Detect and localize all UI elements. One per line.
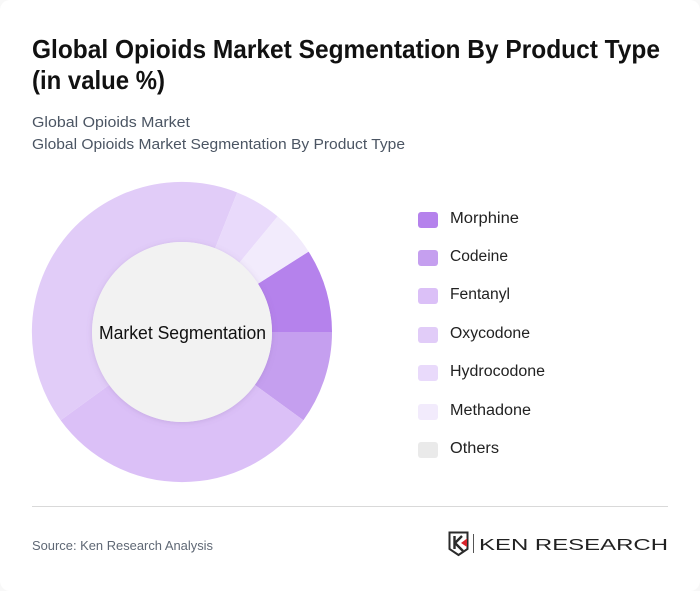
legend item: Hydrocodone: Hydrocodone bbox=[450, 363, 545, 380]
title: (in value %) bbox=[32, 65, 165, 95]
segment: Hydrocodone bbox=[215, 192, 278, 263]
legend item: Morphine bbox=[418, 210, 519, 228]
segment: Oxycodone bbox=[32, 182, 237, 420]
legend item: Fentanyl bbox=[418, 286, 510, 304]
segment: Codeine bbox=[255, 332, 332, 420]
legend item: Codeine: Codeine bbox=[450, 248, 508, 265]
subtitle: Global Opioids Market Segmentation By Product Type bbox=[32, 136, 405, 153]
legend item: Others bbox=[418, 440, 499, 458]
donut centre bbox=[92, 242, 272, 422]
source note: Source: Ken Research Analysis bbox=[32, 538, 213, 553]
subtitle bbox=[32, 114, 405, 153]
legend item: Methadone bbox=[418, 402, 531, 420]
donut chart bbox=[32, 182, 332, 482]
centre label: Market Segmentation bbox=[99, 323, 266, 343]
legend item: Others: Others bbox=[450, 440, 499, 457]
legend item: Hydrocodone bbox=[418, 363, 545, 381]
segment: Morphine bbox=[258, 252, 332, 332]
legend item: Oxycodone bbox=[418, 325, 530, 343]
segment: Fentanyl bbox=[61, 385, 303, 482]
legend item: Fentanyl: Fentanyl bbox=[450, 286, 510, 303]
icon: shield mark bbox=[450, 532, 468, 555]
legend item: Codeine bbox=[418, 248, 508, 266]
title: Global Opioids Market Segmentation By Product Type bbox=[32, 34, 660, 64]
legend item: Oxycodone: Oxycodone bbox=[450, 325, 530, 342]
legend item: Morphine: Morphine bbox=[450, 210, 519, 227]
title bbox=[32, 34, 660, 95]
legend bbox=[418, 210, 545, 458]
legend item: Methadone: Methadone bbox=[450, 402, 531, 419]
logo: Ken Research bbox=[450, 532, 668, 555]
segment: Methadone bbox=[239, 216, 309, 284]
subtitle: Global Opioids Market bbox=[32, 114, 191, 131]
wordmark: KEN RESEARCH bbox=[479, 537, 668, 554]
